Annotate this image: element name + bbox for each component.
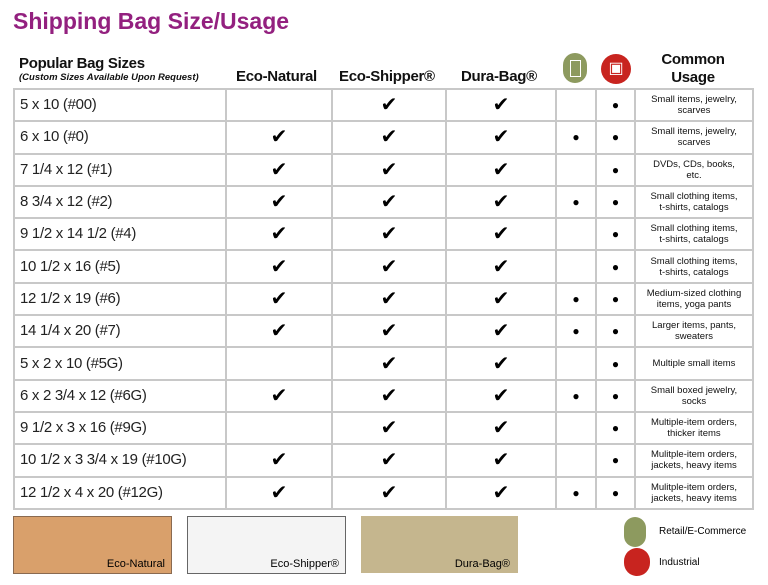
table: DVDs, CDs, books, — [653, 159, 735, 170]
header: Eco-Natural: Eco-Natural — [236, 68, 317, 85]
icon: industrial box — [601, 54, 631, 84]
header: popular bag sizes: Popular Bag Sizes — [19, 55, 145, 72]
table: 7 1/4 x 12 (#1) — [20, 161, 112, 178]
swatch: Eco-Shipper: Eco-Shipper® — [270, 558, 339, 570]
table: ✔ — [493, 482, 509, 504]
table: ✔ — [381, 288, 397, 310]
table: ● — [612, 130, 619, 144]
table: ✔ — [271, 256, 287, 278]
table: ✔ — [271, 288, 287, 310]
table: ✔ — [271, 159, 287, 181]
table: ✔ — [493, 159, 509, 181]
table: 8 3/4 x 12 (#2) — [20, 193, 112, 210]
table: ● — [612, 324, 619, 338]
table: ✔ — [381, 94, 397, 116]
table: ✔ — [493, 385, 509, 407]
swatch: Eco-Natural: Eco-Natural — [107, 558, 165, 570]
legend: industrial — [624, 548, 700, 576]
table: ✔ — [271, 320, 287, 342]
table: scarves — [678, 137, 710, 148]
table: t-shirts, catalogs — [659, 267, 729, 278]
table: Small items, jewelry, — [651, 126, 737, 137]
table: ● — [612, 357, 619, 371]
table: Small items, jewelry, — [651, 94, 737, 105]
table: ● — [612, 453, 619, 467]
table: Medium-sized clothing — [647, 288, 741, 299]
table: Small clothing items, — [650, 223, 738, 234]
title: Shipping Bag Size/Usage — [13, 8, 289, 34]
table: ✔ — [381, 191, 397, 213]
table: ✔ — [381, 449, 397, 471]
header: popular bag sizes: (Custom Sizes Available Upon Request) — [19, 72, 199, 83]
table: 6 x 10 (#0) — [20, 128, 88, 145]
table: sweaters — [675, 331, 713, 342]
table: ✔ — [381, 353, 397, 375]
header: Dura-Bag: Dura-Bag® — [461, 68, 537, 85]
table: ✔ — [271, 126, 287, 148]
table: ✔ — [271, 191, 287, 213]
table: ● — [612, 292, 619, 306]
table: ✔ — [381, 417, 397, 439]
table: ✔ — [271, 482, 287, 504]
table: ✔ — [381, 320, 397, 342]
swatch: Eco-Natural — [13, 516, 172, 574]
table: ● — [612, 163, 619, 177]
table: ✔ — [381, 223, 397, 245]
table: Mulitple-item orders, — [651, 482, 737, 493]
table: ✔ — [493, 288, 509, 310]
table: thicker items — [667, 428, 721, 439]
table: ● — [572, 389, 580, 403]
table: ✔ — [493, 449, 509, 471]
legend: industrial: Industrial — [659, 557, 700, 568]
table: 10 1/2 x 16 (#5) — [20, 258, 120, 275]
table: ✔ — [493, 256, 509, 278]
table: ● — [612, 195, 619, 209]
table: ✔ — [381, 385, 397, 407]
table: Larger items, pants, — [652, 320, 736, 331]
swatch: Dura-Bag — [361, 516, 518, 573]
table: t-shirts, catalogs — [659, 202, 729, 213]
table: items, yoga pants — [657, 299, 731, 310]
table: ● — [572, 486, 580, 500]
icon: industrial box: ▣ — [608, 60, 624, 77]
table: ● — [612, 486, 619, 500]
header: popular bag sizes — [19, 55, 199, 83]
table: ● — [612, 260, 619, 274]
table: ✔ — [493, 191, 509, 213]
table: Multiple small items — [653, 358, 735, 369]
table: ✔ — [493, 417, 509, 439]
table: Mulitple-item orders, — [651, 449, 737, 460]
table: 5 x 2 x 10 (#5G) — [20, 355, 123, 372]
legend: retail — [624, 517, 746, 547]
table: ● — [572, 324, 580, 338]
table: ✔ — [381, 482, 397, 504]
table: 14 1/4 x 20 (#7) — [20, 322, 120, 339]
table: socks — [682, 396, 706, 407]
table: Multiple-item orders, — [651, 417, 737, 428]
table: Small clothing items, — [650, 191, 738, 202]
table: t-shirts, catalogs — [659, 234, 729, 245]
swatch: Eco-Shipper — [187, 516, 346, 574]
table: jackets, heavy items — [651, 460, 737, 471]
header: Eco-Shipper: Eco-Shipper® — [339, 68, 435, 85]
icon: retail bag — [563, 53, 587, 83]
table: ✔ — [271, 223, 287, 245]
table: Small boxed jewelry, — [651, 385, 737, 396]
table: jackets, heavy items — [651, 493, 737, 504]
table: ✔ — [493, 320, 509, 342]
table: 10 1/2 x 3 3/4 x 19 (#10G) — [20, 451, 186, 468]
swatch: Dura-Bag: Dura-Bag® — [455, 558, 510, 570]
table: ● — [612, 421, 619, 435]
table: 12 1/2 x 19 (#6) — [20, 290, 120, 307]
legend: retail: Retail/E-Commerce — [659, 526, 746, 537]
table: 5 x 10 (#00) — [20, 96, 96, 113]
table — [13, 88, 754, 510]
table: ● — [612, 389, 619, 403]
table: ● — [612, 227, 619, 241]
table: ✔ — [381, 256, 397, 278]
table: ✔ — [381, 126, 397, 148]
table: 6 x 2 3/4 x 12 (#6G) — [20, 387, 147, 404]
table: ✔ — [493, 223, 509, 245]
table: ✔ — [493, 94, 509, 116]
table: ● — [612, 98, 619, 112]
table: ✔ — [381, 159, 397, 181]
table: Small clothing items, — [650, 256, 738, 267]
table: ● — [572, 292, 580, 306]
table: ● — [572, 130, 580, 144]
table: 9 1/2 x 3 x 16 (#9G) — [20, 419, 147, 436]
table: ✔ — [271, 385, 287, 407]
header: common usage: Common Usage — [661, 51, 725, 86]
table: scarves — [678, 105, 710, 116]
table: ✔ — [271, 449, 287, 471]
table: 12 1/2 x 4 x 20 (#12G) — [20, 484, 163, 501]
table: 9 1/2 x 14 1/2 (#4) — [20, 225, 136, 242]
table: ● — [572, 195, 580, 209]
table: etc. — [686, 170, 702, 181]
table: ✔ — [493, 126, 509, 148]
table: ✔ — [493, 353, 509, 375]
